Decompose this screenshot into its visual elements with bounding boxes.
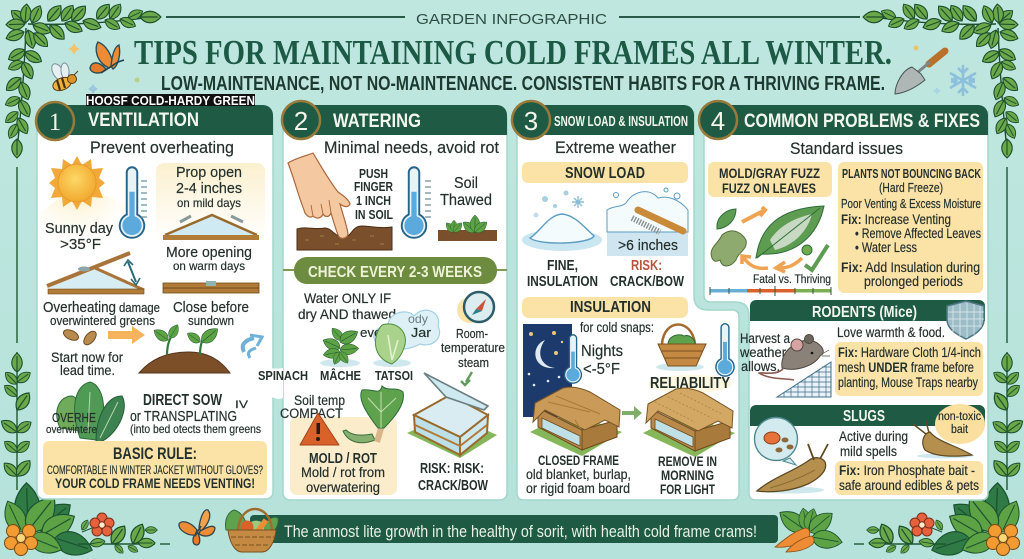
icon: frame with blanket [530,387,622,456]
callout: basic rule: COMFORTABLE IN WINTER JACKET WITHOUT GLOVES? [47,465,263,477]
callout: prop open [156,163,265,241]
callout: hardware cloth fix: planting, Mouse Traps nearby [838,375,978,390]
sun rays glow [38,183,150,250]
heading: SNOW LOAD & INSULATION [554,113,688,130]
icon: vegetable basket [225,509,278,552]
text: overheating damage: damage [119,301,160,315]
callout: mold rot: COMPACT [280,406,343,421]
icon: steam cloud [360,310,440,349]
icon: night sky [523,324,572,417]
callout: basic rule: YOUR COLD FRAME NEEDS VENTING! [55,476,255,491]
panel: watering [258,101,507,500]
text: direct sow: IV [235,399,249,411]
panel: ventilation [36,94,273,499]
banner: check every 2-3 weeks [283,257,507,284]
icon: closed frame [163,281,259,293]
icon: lettuce plant [361,386,403,442]
text: overheating damage: overwintered greens [50,314,155,328]
text: risk crack bow [610,258,684,290]
callout: mold gray fuzz: FUZZ ON LEAVES [722,181,816,196]
text: risk crack bow [418,461,488,494]
text: direct sow: DIRECT SOW [143,392,223,409]
callout: mold rot: MOLD / ROT [309,451,377,467]
number badge 1 [36,102,74,140]
text: push finger: IN SOIL [355,208,393,222]
arrow: green [622,406,642,420]
callout: mold gray fuzz [708,162,832,197]
text: sunny day [45,220,113,253]
text: start now [51,350,123,378]
heading: RODENTS (Mice) [812,304,917,321]
icon: heavy snow with brush [607,188,688,256]
text: room temperature steam [441,327,505,370]
text: soil thawed: Thawed [440,192,492,209]
text: reliability: RELIABILITY [650,375,731,392]
icon: compass [457,292,494,323]
bottom left corner foliage [0,482,170,559]
callout: non-toxic bait: non-toxic [938,411,981,423]
header bar [750,405,985,426]
callout: hardware cloth fix [835,342,983,396]
header bar [712,105,988,135]
text: risk crack bow: CRACK/BOW [610,274,684,290]
callout: prop open: 2-4 inches [176,180,242,197]
icon: leafy greens [57,382,124,442]
icon: carrots [775,505,844,552]
callout: plants not bouncing back: (Hard Freeze) [879,181,943,195]
footer banner [250,515,778,543]
callout: prop open: on mild days [177,196,241,210]
icon: mold leaf cycle [711,206,828,272]
icon: small thermometer [565,335,581,383]
subheading: Prevent overheating [90,138,234,157]
text: soil thawed: Soil [454,175,478,192]
text: push finger: FINGER [354,180,393,194]
panel: snow load and insulation [512,101,739,500]
text: closed frame: old blanket, burlap, [526,467,631,482]
text: harvest: weather [739,345,786,360]
text: remove in morning: REMOVE IN [658,454,717,469]
text: sunny day: >35°F [60,236,101,253]
text: room temperature steam: steam [458,356,489,370]
text: harvest: Harvest a [740,331,790,346]
icon: warning [300,413,339,445]
icon: thermometer [402,167,431,238]
text: push finger: 1 INCH [356,194,391,208]
text: risk crack bow: RISK: [631,258,662,274]
icon: tatsoi [373,324,411,367]
text: start now: Start now for [51,350,123,365]
icon: propped frame [163,215,259,240]
text: closed frame [526,453,631,496]
scale bar [710,286,831,296]
text: start now: lead time. [60,363,115,378]
text: close before sundown: sundown [188,314,234,328]
band: snow load [522,162,688,183]
callout: plants not bouncing back: • Remove Affected Leaves [855,226,981,241]
callout: iron phosphate fix: safe around edibles & pets [839,478,979,493]
callout: plants not bouncing back: Fix: Increase Venting [841,212,951,227]
number badge 2: 2 [294,106,308,136]
callout: plants not bouncing back: Poor Venting & Excess Moisture [841,197,981,211]
text: remove in morning [658,454,717,497]
subheading: Standard issues [790,139,903,158]
text: overhe label [46,410,97,436]
text: push finger [354,167,393,222]
stray caption strip: HOOSF COLD-HARDY GREEN [86,94,255,108]
icon: sparkle blue [88,84,98,94]
text: overhe label: OVERHE [52,410,96,425]
right vine border [863,1,1024,490]
text: love warmth: Love warmth & food. [837,325,945,340]
text: more opening: on warm days [173,259,245,273]
icon: caterpillar [343,430,375,443]
callout: plants not bouncing back: prolonged periods [864,274,963,289]
callout: basic rule: BASIC RULE: [113,444,197,463]
icon: sun [49,156,105,210]
callout: non-toxic bait: bait [951,424,969,436]
text: remove in morning: FOR LIGHT [660,482,716,497]
icon: thermometer [120,167,147,238]
heading: COMMON PROBLEMS & FIXES [744,111,980,132]
band: snow load: SNOW LOAD [565,165,645,182]
text: active during: mild spells [840,444,897,459]
text: risk crack bow: CRACK/BOW [418,478,488,494]
text: close before sundown: Close before [173,299,249,316]
icon: sparkle left [68,43,80,55]
text: nights: <-5°F [583,361,620,378]
callout: mold rot [280,393,397,495]
arrow: seeds to seedlings [108,326,145,344]
icon: mouse [759,334,830,380]
icon: basket of greens [656,324,706,371]
text: more opening: More opening [166,244,252,261]
label: mache: MÂCHE [320,368,361,383]
text: fine insulation [527,258,598,290]
band: insulation: INSULATION [570,299,651,316]
eyebrow label: GARDEN INFOGRAPHIC [416,11,607,28]
number badge 3 [512,101,550,139]
bottom right corner foliage [854,482,1024,559]
heading: WATERING [333,111,421,132]
section: slugs [750,404,985,495]
icon: shield [947,301,984,339]
text: more opening [166,244,252,273]
callout: plants not bouncing back [838,162,983,293]
icon: bait bubble [754,418,798,465]
heading: VENTILATION [88,110,199,131]
header bar [292,105,507,135]
text: direct sow: (into bed otects them greens [130,422,261,436]
icon: steam cloud: even ir [360,325,401,340]
icon: open frame [47,253,144,294]
subheading: Extreme weather [555,138,676,157]
callout: plants not bouncing back: • Water Less [855,240,917,255]
text: direct sow: or TRANSPLATING [130,408,237,425]
callout: mold rot: Soil temp [294,393,345,408]
footer banner: The anmost lite growth in the healthy of sorit, with health cold frame crams! [284,522,757,541]
text: soil thawed [440,175,492,209]
icon: spinach [320,325,361,367]
text: nights: Nights [581,343,623,360]
text: overheating damage [43,299,160,328]
text: room temperature steam: temperature [441,341,505,355]
left vine border [0,1,161,490]
icon: glass cold frame [407,373,497,458]
icon: large slug [756,444,828,494]
text: closed frame: CLOSED FRAME [538,453,619,468]
text: room temperature steam: Room- [456,327,488,341]
number badge 4: 4 [711,106,725,136]
icon: hand pushing finger in soil [288,153,350,238]
text: active during [839,429,908,459]
callout: mold rot: Mold / rot from [301,465,385,480]
icon: trowel [895,51,945,94]
icon: steam cloud: Jar [411,325,432,340]
callout: iron phosphate fix: Fix: Iron Phosphate bait - [839,463,975,478]
icon: dot green [134,78,140,82]
icon: soil [297,226,392,250]
icon: butterfly bottom [179,510,215,545]
text: active during: Active during [839,429,908,444]
text: water only if: dry AND thawed [298,306,396,322]
callout: plants not bouncing back: Fix: Add Insulation during [841,260,980,275]
text: for cold snaps: for cold snaps: [580,320,654,335]
text: water only if: Water ONLY IF [304,290,391,306]
arrow: to frame [461,372,472,385]
icon: sparkle right [914,46,918,50]
icon: sparkle pale [933,87,941,95]
callout: prop open: Prop open [176,164,242,181]
banner: check every 2-3 weeks: CHECK EVERY 2-3 WEEKS [308,264,482,281]
text: harvest: allows. [741,359,780,374]
band: insulation [522,297,688,318]
label: spinach: SPINACH [258,368,308,383]
text: nights [581,343,623,378]
icon: seeds [62,328,99,347]
icon: small slug [913,421,973,458]
icon: light snow pile [522,190,602,251]
callout: basic rule [43,441,267,495]
icon: blue curved arrow [243,335,262,358]
text: fine insulation: FINE, [547,258,578,274]
number badge 2 [282,101,320,139]
callout: iron phosphate fix [835,461,983,495]
subheading: Minimal needs, avoid rot [324,138,499,157]
icon: plants in thawed soil [438,215,497,241]
label: tatsoi: TATSOI [375,368,413,383]
text: push finger: PUSH [359,167,388,181]
text: fatal vs thriving: Fatal vs. Thriving [753,274,831,286]
icon: wire mesh [777,362,831,397]
number badge 3: 3 [524,106,538,136]
text: overheating damage: Overheating [43,299,116,316]
icon: seedlings in soil [139,323,230,373]
header bar [46,105,273,135]
text: closed frame: or rigid foam board [526,481,630,496]
icon: bee [49,62,78,93]
text: direct sow [130,392,261,436]
callout: hardware cloth fix: Fix: Hardware Cloth 1/4-inch [838,345,981,360]
text: close before sundown [173,299,249,328]
panel: common problems and fixes [699,101,988,500]
icon: butterfly top [90,42,124,73]
text: water only if [298,290,396,322]
number badge 4 [699,101,737,139]
header bar [750,300,985,321]
text: overhe label: overwintere [46,424,97,436]
blob behind spinach label [258,368,283,399]
callout: mold gray fuzz: MOLD/GRAY FUZZ [719,166,820,181]
callout: mold rot: overwatering [306,480,380,495]
text: six inches: >6 inches [618,237,678,254]
callout: non-toxic bait [935,404,985,444]
callout: hardware cloth fix: mesh UNDER frame before [838,360,974,375]
icon: frame with burlap [643,388,735,457]
text: remove in morning: MORNING [661,468,714,483]
number badge 1: 1 [49,109,61,136]
text: sunny day: Sunny day [45,220,113,237]
heading: SLUGS [843,408,885,425]
icon: thermometer right [716,324,734,376]
icon: steam cloud: ody [408,312,428,326]
text: harvest [739,331,790,374]
icon: snowflake [950,65,976,96]
header bar [525,105,694,135]
text: fine insulation: INSULATION [527,274,598,290]
text: risk crack bow: RISK: RISK: [420,461,484,477]
section: rodents [739,300,985,397]
